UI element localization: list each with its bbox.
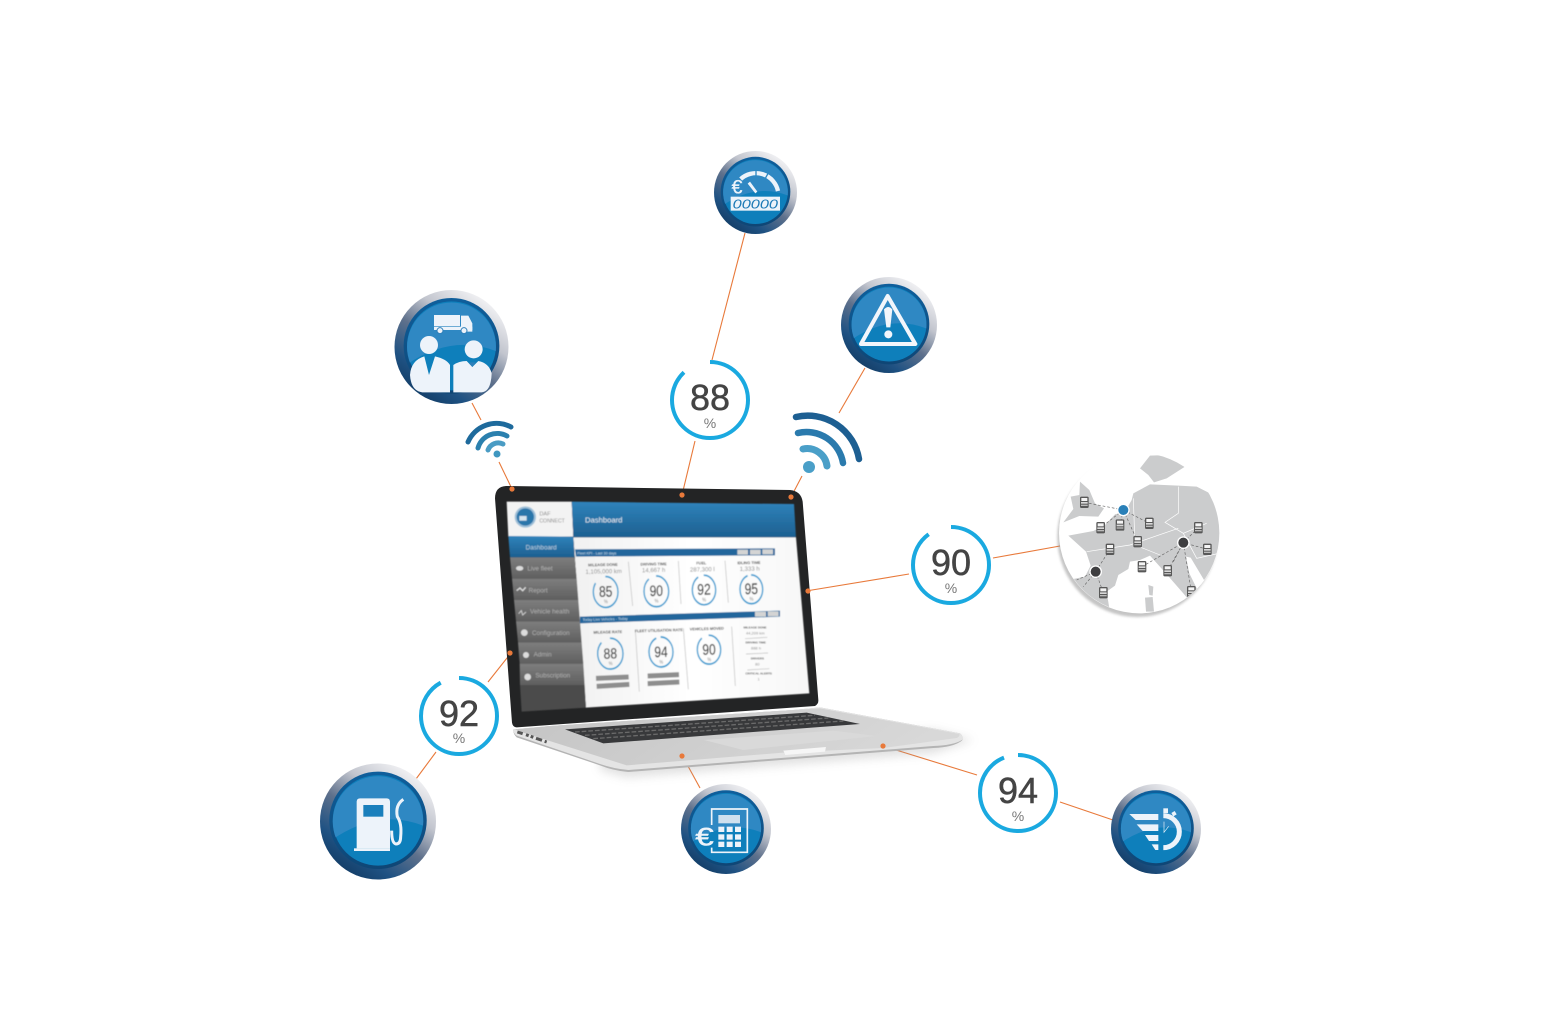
attachment dots <box>507 486 886 759</box>
progress ring: 88 percent: 88 <box>690 377 730 418</box>
button: drivers and truck <box>394 290 508 404</box>
progress ring: 90 percent: % <box>945 580 957 596</box>
kpi: fuel: % <box>702 597 707 604</box>
connector lines <box>416 233 1113 820</box>
kpi: mileage done: % <box>604 599 608 605</box>
kpi: mileage rate: 88 <box>603 645 617 662</box>
progress ring: 94 percent <box>980 755 1056 831</box>
laptop <box>495 486 973 777</box>
sidebar nav: Configuration <box>532 630 570 637</box>
keyboard <box>565 713 860 743</box>
gray bars <box>596 675 679 686</box>
progress ring: 94 percent: % <box>1012 808 1024 824</box>
kpi: idling time: IDLING TIME <box>737 561 761 565</box>
kpi: fleet utilisation rate <box>635 628 684 668</box>
map land <box>1063 455 1227 612</box>
sidebar nav: Vehicle health <box>530 608 570 615</box>
map of Europe <box>1057 453 1227 617</box>
progress ring: 90 percent <box>913 527 989 603</box>
kpi: fleet utilisation rate: % <box>659 659 664 666</box>
live stats: DRIVING TIME <box>745 640 766 644</box>
laptop lid and screen: Dashboard <box>526 544 557 551</box>
ports <box>517 732 547 742</box>
kpi: mileage rate: % <box>609 661 613 667</box>
live stats: CRITICAL ALERTS <box>745 672 772 676</box>
logo: CONNECT <box>539 518 566 524</box>
laptop lid and screen <box>495 486 818 727</box>
wifi icon: left <box>468 423 511 458</box>
logo: DAF <box>539 512 551 518</box>
button: euro gauge: 00000 <box>733 197 779 212</box>
logo <box>515 506 566 528</box>
live stats <box>743 625 772 682</box>
kpi: vehicles moved <box>690 627 725 665</box>
section band 2: Today Live Vehicles - Today <box>583 617 628 622</box>
wifi icon: right <box>796 416 859 473</box>
trackpad <box>704 731 877 750</box>
kpi: fuel: 287,300 l <box>690 567 715 574</box>
kpi: idling time: 95 <box>745 581 758 597</box>
live stats: 888 h <box>751 646 761 651</box>
live stats: MILEAGE DONE <box>743 625 767 629</box>
kpi: fuel: 92 <box>697 581 711 598</box>
section band 1 <box>575 548 775 557</box>
kpi: vehicles moved: 90 <box>702 641 716 658</box>
kpi: driving time: 14,667 h <box>642 568 665 574</box>
kpi: driving time: % <box>655 598 659 605</box>
button: calculator with euro: € <box>695 823 714 852</box>
button: fast service clock <box>1111 784 1201 874</box>
sidebar nav: Report <box>529 587 548 594</box>
sidebar nav: Admin <box>534 652 552 659</box>
sidebar nav: Live fleet <box>527 566 553 573</box>
kpi: driving time: 90 <box>650 583 664 599</box>
kpi: idling time: 1,333 h <box>740 567 760 573</box>
progress ring: 92 percent: % <box>453 730 465 746</box>
kpi: mileage rate <box>593 630 623 670</box>
progress ring: 94 percent: 94 <box>998 770 1038 811</box>
kpi: driving time <box>640 562 669 607</box>
progress ring: 92 percent <box>421 678 497 754</box>
progress ring: 88 percent: % <box>704 415 716 431</box>
button: fuel pump <box>320 764 436 880</box>
live stats: 44,209 km <box>746 631 765 636</box>
sidebar nav <box>516 566 571 680</box>
live stats: DRIVERS <box>751 656 764 660</box>
live stats: 1 <box>758 677 761 682</box>
kpi: mileage rate: MILEAGE RATE <box>593 630 623 635</box>
kpi: mileage done: 1,105,000 km <box>585 569 622 576</box>
progress ring: 88 percent <box>672 362 748 438</box>
section band 1: Fleet KPI - Last 30 days <box>577 551 617 555</box>
kpi: mileage done: MILEAGE DONE <box>588 563 618 567</box>
button: calculator with euro <box>681 784 771 874</box>
kpi: vehicles moved: % <box>707 657 712 663</box>
kpi: fuel: FUEL <box>696 561 707 565</box>
section band 2 <box>580 611 780 623</box>
sidebar nav: Subscription <box>535 673 571 680</box>
kpi: mileage done: 85 <box>599 583 612 600</box>
progress ring: 92 percent: 92 <box>439 693 479 734</box>
laptop base <box>513 707 973 777</box>
kpi: fleet utilisation rate: FLEET UTILISATION RATE <box>635 628 683 633</box>
kpi: fleet utilisation rate: 94 <box>654 644 668 660</box>
dividers <box>628 561 769 692</box>
kpi: mileage done <box>585 563 622 608</box>
button: euro gauge <box>714 151 797 234</box>
progress ring: 90 percent: 90 <box>931 542 971 583</box>
kpi: idling time <box>737 561 763 604</box>
laptop lid and screen: Dashboard <box>585 516 622 525</box>
button: warning <box>841 277 937 373</box>
kpi: fuel <box>690 561 716 605</box>
kpi: driving time: DRIVING TIME <box>640 562 667 567</box>
kpi: vehicles moved: VEHICLES MOVED <box>690 627 724 631</box>
button: euro gauge: € <box>732 177 743 198</box>
kpi: idling time: % <box>750 596 754 603</box>
live stats: 80 <box>755 662 760 667</box>
